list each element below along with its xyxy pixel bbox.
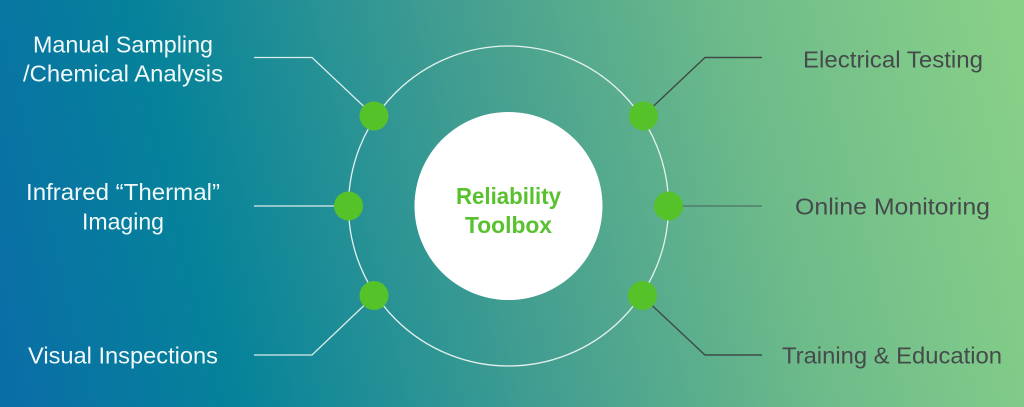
center circle <box>414 112 602 300</box>
center title: Toolbox <box>465 212 552 238</box>
label: Infrared Thermal Imaging: Infrared “Thermal” <box>26 179 220 205</box>
label: Electrical Testing: Electrical Testing <box>803 46 983 72</box>
connector: Visual Inspections <box>254 296 374 355</box>
connector: Training and Education <box>642 296 762 355</box>
node: Visual Inspections <box>360 281 388 310</box>
node: Online Monitoring <box>654 192 683 220</box>
connector: Manual Sampling <box>254 58 374 116</box>
label: Infrared Thermal Imaging <box>26 179 220 234</box>
node: Training and Education <box>628 281 657 310</box>
node: Infrared Imaging <box>334 192 363 220</box>
node: Electrical Testing <box>629 102 658 130</box>
connector: Infrared Imaging <box>254 205 348 207</box>
label: Infrared Thermal Imaging: Imaging <box>82 208 164 234</box>
center title: Reliability <box>456 183 561 209</box>
center title <box>456 183 561 238</box>
label: Manual Sampling / Chemical Analysis <box>23 32 223 86</box>
label: Online Monitoring: Online Monitoring <box>795 194 990 220</box>
label: Manual Sampling / Chemical Analysis: /Chemical Analysis <box>23 60 223 86</box>
label: Training and Education: Training & Education <box>782 342 1002 368</box>
connector: Online Monitoring <box>669 205 762 207</box>
label: Manual Sampling / Chemical Analysis: Manual Sampling <box>33 32 213 58</box>
connector: Electrical Testing <box>643 58 762 116</box>
label: Visual Inspections: Visual Inspections <box>28 342 218 368</box>
node: Manual Sampling <box>360 102 388 130</box>
outer ring <box>348 46 668 366</box>
